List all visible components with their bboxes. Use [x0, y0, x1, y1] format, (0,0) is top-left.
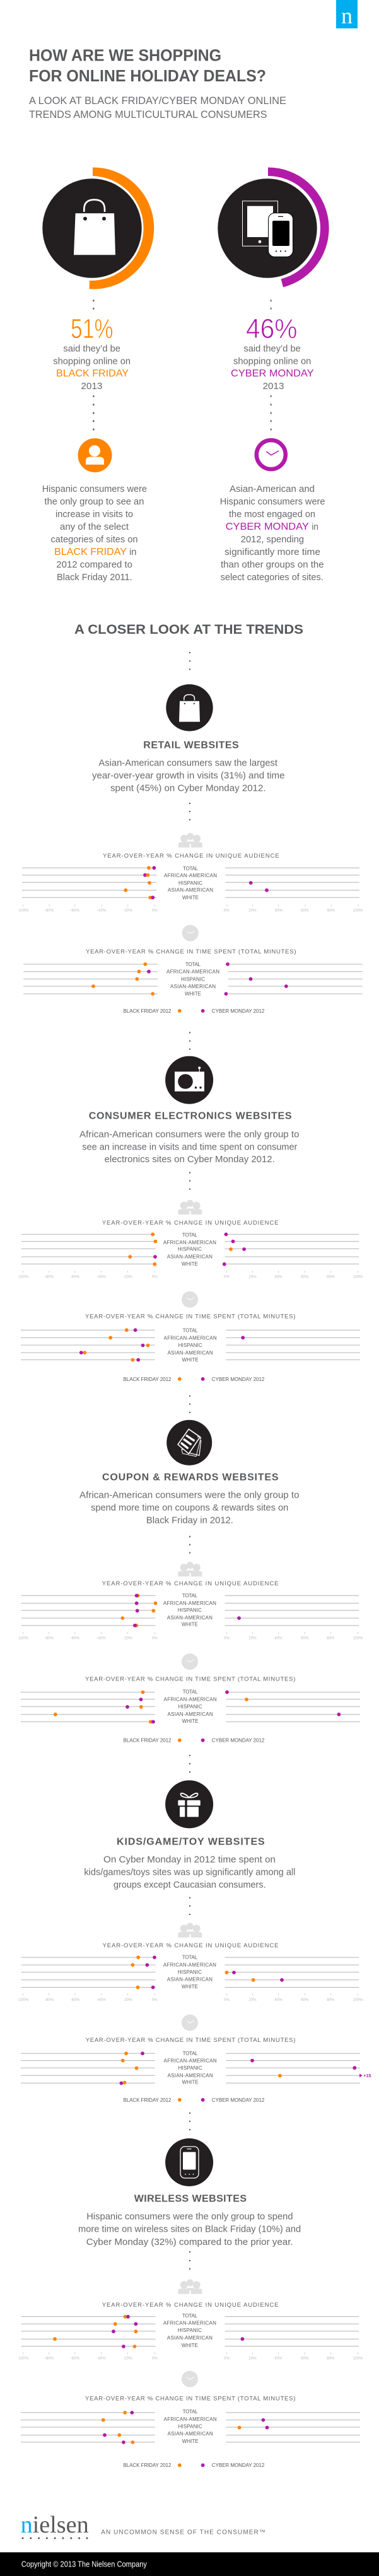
- legend: CYBER MONDAY 2012: [212, 1738, 265, 1744]
- chart: coupon unique audience: WHITE: [182, 1622, 198, 1628]
- panel: cyber monday stat: [218, 167, 329, 583]
- chart: wireless unique audience: -20%: [123, 2357, 132, 2361]
- chart: retail unique audience: 60%: [301, 909, 309, 913]
- text: hispanic consumers: Hispanic consumers were: [42, 484, 147, 494]
- legend: [124, 2462, 265, 2468]
- subtitle: [29, 95, 286, 120]
- chart: coupon time spent: AFRICAN-AMERICAN: [164, 1697, 217, 1703]
- stat caption: [231, 343, 314, 392]
- chart: retail unique audience: TOTAL: [183, 866, 199, 871]
- text: hispanic consumers: BLACK FRIDAY: [54, 547, 127, 557]
- dotted connector: [189, 1755, 190, 1773]
- stat caption: CYBER MONDAY: [231, 368, 314, 379]
- text: wireless summary: Cyber Monday (32%) compared to the prior year.: [86, 2237, 293, 2247]
- chart: kids unique audience: 100%: [353, 1998, 363, 2002]
- chart: kids unique audience: [17, 1955, 363, 2002]
- legend: CYBER MONDAY 2012: [212, 2097, 265, 2103]
- icon: clock: [182, 1653, 198, 1670]
- chart: retail unique audience: -60%: [70, 909, 79, 913]
- chart: kids unique audience: 60%: [301, 1998, 309, 2002]
- legend: CYBER MONDAY 2012: [212, 1008, 265, 1014]
- chart title: time spent: YEAR-OVER-YEAR % CHANGE IN TIME SPENT (TOTAL MINUTES): [86, 948, 296, 955]
- chart: kids unique audience: 40%: [274, 1998, 283, 2002]
- text: hispanic consumers: [42, 484, 147, 583]
- subtitle: A LOOK AT BLACK FRIDAY/CYBER MONDAY ONLINE: [29, 95, 286, 107]
- icon: clock: [182, 2371, 198, 2387]
- icon: shopping bag in ring: [42, 167, 154, 289]
- chart: wireless unique audience: 0%: [224, 2357, 230, 2361]
- panel: kids game toy websites: [17, 1755, 371, 2103]
- chart: electronics unique audience: HISPANIC: [178, 1247, 202, 1252]
- chart: retail time spent: [23, 962, 363, 997]
- chart: wireless unique audience: -80%: [45, 2357, 54, 2361]
- chart: wireless unique audience: TOTAL: [182, 2313, 197, 2319]
- text: wireless summary: [78, 2212, 301, 2247]
- chart: electronics unique audience: 40%: [274, 1275, 283, 1279]
- icon: radio: [165, 1056, 213, 1104]
- tagline: AN UNCOMMON SENSE OF THE CONSUMER™: [101, 2529, 265, 2536]
- heading: kids game toy websites: KIDS/GAME/TOY WEBSITES: [117, 1836, 265, 1847]
- title: FOR ONLINE HOLIDAY DEALS?: [29, 66, 266, 85]
- text: retail summary: spent (45%) on Cyber Monday 2012.: [110, 783, 266, 793]
- chart: retail unique audience: 80%: [327, 909, 335, 913]
- title: HOW ARE WE SHOPPING: [29, 46, 221, 65]
- callout: off-scale value +15: +15: [363, 2073, 371, 2078]
- chart: electronics unique audience: TOTAL: [182, 1232, 197, 1238]
- chart: wireless time spent: AFRICAN-AMERICAN: [164, 2416, 217, 2422]
- chart: kids unique audience: ASIAN-AMERICAN: [167, 1977, 213, 1983]
- chart: electronics time spent: ASIAN-AMERICAN: [168, 1350, 213, 1356]
- icon: shopping bag: [166, 684, 213, 731]
- chart: electronics unique audience: ASIAN-AMERICAN: [167, 1254, 213, 1260]
- legend: BLACK FRIDAY 2012: [124, 2462, 172, 2468]
- chart: kids unique audience: 0%: [152, 1998, 158, 2002]
- chart: electronics time spent: [21, 1328, 360, 1363]
- heading: coupon and rewards websites: COUPON & REWARDS WEBSITES: [102, 1472, 279, 1483]
- icon: tablet and phone in ring: [218, 167, 329, 288]
- chart: wireless unique audience: 60%: [301, 2357, 309, 2361]
- text: asian-american and hispanic: Asian-American and: [230, 484, 315, 494]
- chart title: unique audience: YEAR-OVER-YEAR % CHANGE IN UNIQUE AUDIENCE: [102, 2302, 278, 2309]
- chart: kids unique audience: -100%: [17, 1998, 29, 2002]
- legend: [124, 1738, 265, 1744]
- text: hispanic consumers: in: [129, 547, 137, 557]
- chart: wireless unique audience: AFRICAN-AMERICAN: [163, 2321, 216, 2326]
- text: consumer electronics summary: African-American consumers were the only group to: [79, 1129, 299, 1140]
- heading: wireless websites: WIRELESS WEBSITES: [134, 2193, 247, 2204]
- text: coupon summary: [79, 1490, 299, 1525]
- chart: kids time spent: WHITE: [182, 2080, 199, 2085]
- chart: kids time spent: AFRICAN-AMERICAN: [164, 2058, 217, 2064]
- chart: kids unique audience: 0%: [224, 1998, 230, 2002]
- chart: electronics unique audience: 0%: [152, 1275, 158, 1279]
- stat caption: BLACK FRIDAY: [56, 368, 129, 379]
- dotted connector: [189, 1172, 190, 1190]
- chart: electronics unique audience: AFRICAN-AMERICAN: [163, 1240, 216, 1245]
- chart: electronics unique audience: 100%: [353, 1275, 363, 1279]
- icon: people: [178, 1200, 202, 1215]
- chart: coupon time spent: [21, 1689, 360, 1724]
- chart: retail unique audience: -40%: [97, 909, 107, 913]
- chart: electronics unique audience: -100%: [17, 1275, 29, 1279]
- chart: wireless unique audience: -40%: [96, 2357, 106, 2361]
- text: coupon summary: African-American consumers were the only group to: [79, 1490, 299, 1501]
- text: retail summary: year-over-year growth in visits (31%) and time: [92, 770, 285, 781]
- title: [29, 46, 266, 85]
- text: consumer electronics summary: see an increase in visits and time spent on consumer: [82, 1142, 297, 1153]
- text: asian-american and hispanic: Hispanic consumers were: [220, 496, 325, 507]
- text: hispanic consumers: 2012 compared to: [56, 559, 132, 570]
- text: asian-american and hispanic: select categories of sites.: [221, 572, 324, 583]
- icon: gift: [165, 1780, 213, 1828]
- stat caption: said they’d be: [243, 343, 301, 354]
- chart: retail time spent: AFRICAN-AMERICAN: [166, 969, 219, 975]
- chart: electronics unique audience: 20%: [248, 1275, 257, 1279]
- chart: coupon time spent: TOTAL: [183, 1689, 198, 1695]
- text: retail summary: Asian-American consumers saw the largest: [98, 757, 278, 768]
- chart: wireless time spent: TOTAL: [183, 2409, 198, 2415]
- text: asian-american and hispanic: the most engaged on: [229, 509, 315, 520]
- chart: retail time spent: HISPANIC: [181, 976, 205, 982]
- text: asian-american and hispanic: in: [312, 522, 318, 532]
- chart: coupon unique audience: AFRICAN-AMERICAN: [163, 1600, 216, 1606]
- dotted connector: [189, 1897, 190, 1915]
- text: hispanic consumers: increase in visits to: [55, 509, 133, 520]
- logo: nielsen n: [336, 0, 358, 28]
- text: consumer electronics summary: [79, 1129, 299, 1165]
- chart title: time spent: YEAR-OVER-YEAR % CHANGE IN TIME SPENT (TOTAL MINUTES): [85, 1313, 295, 1320]
- legend: CYBER MONDAY 2012: [212, 2462, 265, 2468]
- dotted connector: [189, 1032, 190, 1050]
- stat caption: said they’d be: [63, 343, 120, 354]
- legend: [124, 1008, 265, 1014]
- chart: kids unique audience: -20%: [123, 1998, 132, 2002]
- chart: wireless unique audience: 100%: [353, 2357, 363, 2361]
- text: wireless summary: more time on wireless sites on Black Friday (10%) and: [78, 2223, 301, 2235]
- chart: coupon time spent: HISPANIC: [178, 1704, 202, 1710]
- chart: retail time spent: ASIAN-AMERICAN: [170, 984, 216, 989]
- dotted connector: [189, 1395, 190, 1413]
- footer bar: [0, 2552, 379, 2576]
- text: hispanic consumers: categories of sites on: [50, 534, 137, 545]
- icon: people: [178, 1562, 202, 1576]
- chart: electronics time spent: WHITE: [182, 1357, 199, 1363]
- stat caption: shopping online on: [233, 356, 311, 366]
- chart: wireless unique audience: [17, 2313, 363, 2361]
- chart: electronics unique audience: -60%: [71, 1275, 80, 1279]
- chart: retail unique audience: -100%: [18, 909, 29, 913]
- chart: coupon unique audience: -100%: [17, 1636, 29, 1640]
- chart: kids unique audience: -40%: [96, 1998, 106, 2002]
- text: asian-american and hispanic: than other groups on the: [221, 559, 324, 570]
- chart: retail unique audience: WHITE: [182, 895, 199, 900]
- text: retail summary: [92, 757, 285, 793]
- chart: coupon unique audience: 0%: [152, 1636, 158, 1640]
- dotted connector: [93, 300, 95, 431]
- chart: electronics unique audience: -20%: [123, 1275, 132, 1279]
- icon: coupons: [166, 1420, 212, 1466]
- chart: electronics unique audience: [17, 1232, 363, 1279]
- dotted connector: [271, 300, 272, 431]
- chart: wireless unique audience: 0%: [152, 2357, 158, 2361]
- legend: [124, 1377, 265, 1382]
- chart: retail unique audience: -80%: [45, 909, 54, 913]
- chart: wireless unique audience: -100%: [17, 2357, 29, 2361]
- chart: kids time spent: [21, 2051, 360, 2085]
- chart: kids time spent: HISPANIC: [178, 2065, 202, 2071]
- chart: retail unique audience: 0%: [152, 909, 158, 913]
- chart: coupon unique audience: -60%: [71, 1636, 80, 1640]
- logo: nielsen n: n: [341, 3, 353, 28]
- chart: coupon time spent: ASIAN-AMERICAN: [168, 1711, 213, 1717]
- dotted connector: [189, 803, 190, 820]
- chart: retail unique audience: AFRICAN-AMERICAN: [164, 873, 217, 878]
- chart: wireless unique audience: 20%: [248, 2357, 257, 2361]
- icon: clock: [257, 440, 286, 469]
- dotted connector: [189, 1536, 190, 1554]
- panel: black friday stat: [42, 167, 154, 583]
- text: asian-american and hispanic: 2012, spending: [241, 534, 304, 545]
- chart: retail unique audience: [18, 866, 363, 913]
- panel: coupon and rewards websites: [17, 1395, 363, 1744]
- legend: BLACK FRIDAY 2012: [124, 2097, 172, 2103]
- footer bar: Copyright © 2013 The Nielsen Company: [21, 2560, 148, 2569]
- legend: BLACK FRIDAY 2012: [124, 1377, 172, 1382]
- chart: kids unique audience: AFRICAN-AMERICAN: [163, 1962, 216, 1968]
- chart title: unique audience: YEAR-OVER-YEAR % CHANGE IN UNIQUE AUDIENCE: [102, 1220, 278, 1227]
- chart: kids unique audience: -60%: [71, 1998, 80, 2002]
- stat caption: 2013: [263, 381, 284, 392]
- icon: clock: [182, 2014, 198, 2031]
- callout: off-scale value +15: [359, 2073, 371, 2078]
- chart: retail time spent: TOTAL: [185, 962, 201, 967]
- chart: wireless unique audience: HISPANIC: [178, 2328, 202, 2333]
- logo: nielsen wordmark: n: [21, 2512, 33, 2538]
- dotted connector: [189, 2251, 190, 2270]
- text: kids summary: kids/games/toys sites was up significantly among all: [84, 1867, 295, 1878]
- chart: electronics unique audience: 0%: [224, 1275, 230, 1279]
- chart: coupon unique audience: -40%: [96, 1636, 106, 1640]
- chart: electronics time spent: TOTAL: [183, 1328, 198, 1334]
- chart: electronics unique audience: 80%: [327, 1275, 335, 1279]
- chart: retail unique audience: 40%: [275, 909, 283, 913]
- chart: wireless unique audience: 80%: [327, 2357, 335, 2361]
- chart: coupon unique audience: 60%: [301, 1636, 309, 1640]
- chart: coupon unique audience: 20%: [248, 1636, 257, 1640]
- chart title: unique audience: YEAR-OVER-YEAR % CHANGE IN UNIQUE AUDIENCE: [103, 853, 279, 860]
- legend: BLACK FRIDAY 2012: [124, 1008, 172, 1014]
- chart: coupon unique audience: 100%: [353, 1636, 363, 1640]
- chart: retail unique audience: HISPANIC: [178, 880, 202, 886]
- stat: 46%: 46%: [246, 313, 297, 344]
- heading: consumer electronics websites: CONSUMER ELECTRONICS WEBSITES: [89, 1111, 292, 1121]
- chart: coupon time spent: WHITE: [182, 1718, 199, 1724]
- panel: retail websites: [18, 652, 363, 1014]
- chart: wireless time spent: HISPANIC: [178, 2424, 202, 2430]
- legend: BLACK FRIDAY 2012: [124, 1738, 172, 1744]
- icon: person: [78, 438, 112, 472]
- chart: electronics unique audience: -80%: [45, 1275, 54, 1279]
- chart: electronics unique audience: WHITE: [182, 1261, 198, 1267]
- chart: retail time spent: WHITE: [185, 991, 201, 997]
- text: asian-american and hispanic: [220, 484, 325, 583]
- text: wireless summary: Hispanic consumers were the only group to spend: [86, 2212, 293, 2222]
- text: asian-american and hispanic: significantly more time: [224, 547, 320, 557]
- chart: electronics unique audience: -40%: [96, 1275, 106, 1279]
- text: coupon summary: Black Friday in 2012.: [146, 1515, 233, 1525]
- chart: wireless time spent: [21, 2409, 360, 2444]
- chart: coupon unique audience: TOTAL: [182, 1593, 197, 1599]
- text: consumer electronics summary: electronics sites on Cyber Monday 2012.: [105, 1154, 275, 1165]
- text: kids summary: On Cyber Monday in 2012 time spent on: [103, 1854, 276, 1865]
- chart: wireless unique audience: ASIAN-AMERICAN: [167, 2335, 213, 2341]
- chart: electronics unique audience: 60%: [301, 1275, 309, 1279]
- chart: coupon unique audience: 40%: [274, 1636, 283, 1640]
- icon: people: [178, 833, 202, 848]
- stat caption: 2013: [81, 381, 102, 392]
- chart: coupon unique audience: [17, 1593, 363, 1640]
- chart: kids unique audience: -80%: [45, 1998, 54, 2002]
- chart: electronics time spent: HISPANIC: [178, 1343, 202, 1348]
- icon: phone: [165, 2138, 213, 2186]
- text: coupon summary: spend more time on coupons & rewards sites on: [91, 1503, 288, 1513]
- stat: 51%: 51%: [71, 313, 113, 344]
- chart: coupon unique audience: -80%: [45, 1636, 54, 1640]
- chart title: time spent: YEAR-OVER-YEAR % CHANGE IN TIME SPENT (TOTAL MINUTES): [86, 2037, 295, 2044]
- panel: consumer electronics websites: [17, 1032, 363, 1382]
- icon: clock: [182, 925, 199, 941]
- icon: people: [178, 2279, 202, 2294]
- chart: wireless unique audience: 40%: [274, 2357, 283, 2361]
- chart: electronics time spent: AFRICAN-AMERICAN: [164, 1336, 217, 1341]
- text: hispanic consumers: the only group to see an: [44, 496, 144, 507]
- chart title: unique audience: YEAR-OVER-YEAR % CHANGE IN UNIQUE AUDIENCE: [102, 1580, 278, 1587]
- subtitle: TRENDS AMONG MULTICULTURAL CONSUMERS: [29, 108, 267, 120]
- chart: coupon unique audience: ASIAN-AMERICAN: [167, 1615, 213, 1621]
- legend: CYBER MONDAY 2012: [212, 1377, 265, 1382]
- stat caption: shopping online on: [53, 356, 131, 366]
- chart title: time spent: YEAR-OVER-YEAR % CHANGE IN TIME SPENT (TOTAL MINUTES): [85, 2395, 295, 2402]
- legend: [124, 2097, 265, 2103]
- text: kids summary: groups except Caucasian consumers.: [114, 1880, 266, 1891]
- panel: wireless websites: [17, 2113, 363, 2468]
- chart: wireless unique audience: -60%: [71, 2357, 80, 2361]
- chart: kids unique audience: 80%: [327, 1998, 335, 2002]
- chart: retail unique audience: ASIAN-AMERICAN: [168, 887, 213, 893]
- icon: clock: [182, 1291, 198, 1308]
- dotted connector: [189, 2113, 190, 2130]
- chart: coupon unique audience: 0%: [224, 1636, 230, 1640]
- chart: kids unique audience: HISPANIC: [178, 1969, 202, 1975]
- chart title: time spent: YEAR-OVER-YEAR % CHANGE IN TIME SPENT (TOTAL MINUTES): [85, 1676, 295, 1682]
- chart: retail unique audience: -20%: [123, 909, 132, 913]
- chart: coupon unique audience: HISPANIC: [178, 1607, 202, 1613]
- chart: retail unique audience: 20%: [248, 909, 257, 913]
- heading: a closer look: A CLOSER LOOK AT THE TRENDS: [74, 622, 303, 637]
- text: asian-american and hispanic: CYBER MONDAY: [226, 522, 309, 532]
- chart: wireless time spent: WHITE: [182, 2439, 199, 2444]
- chart: kids time spent: ASIAN-AMERICAN: [168, 2073, 213, 2078]
- stat caption: [53, 343, 131, 392]
- chart: coupon unique audience: 80%: [327, 1636, 335, 1640]
- chart: wireless time spent: ASIAN-AMERICAN: [168, 2431, 213, 2437]
- chart: kids unique audience: 20%: [248, 1998, 257, 2002]
- chart: kids time spent: TOTAL: [183, 2051, 198, 2056]
- heading: retail websites: RETAIL WEBSITES: [143, 740, 239, 750]
- chart: kids unique audience: TOTAL: [182, 1955, 197, 1961]
- chart: retail unique audience: 100%: [353, 909, 363, 913]
- icon: people: [178, 1923, 202, 1937]
- chart: kids unique audience: WHITE: [182, 1984, 198, 1990]
- logo: nielsen wordmark: ielsen: [33, 2512, 89, 2538]
- chart: coupon unique audience: -20%: [123, 1636, 132, 1640]
- chart: wireless unique audience: WHITE: [182, 2343, 198, 2348]
- text: hispanic consumers: any of the select: [60, 522, 129, 532]
- text: kids summary: [84, 1854, 295, 1891]
- text: hispanic consumers: Black Friday 2011.: [57, 572, 132, 583]
- chart title: unique audience: YEAR-OVER-YEAR % CHANGE IN UNIQUE AUDIENCE: [102, 1942, 279, 1949]
- dotted connector: [189, 652, 190, 670]
- chart: retail unique audience: 0%: [224, 909, 230, 913]
